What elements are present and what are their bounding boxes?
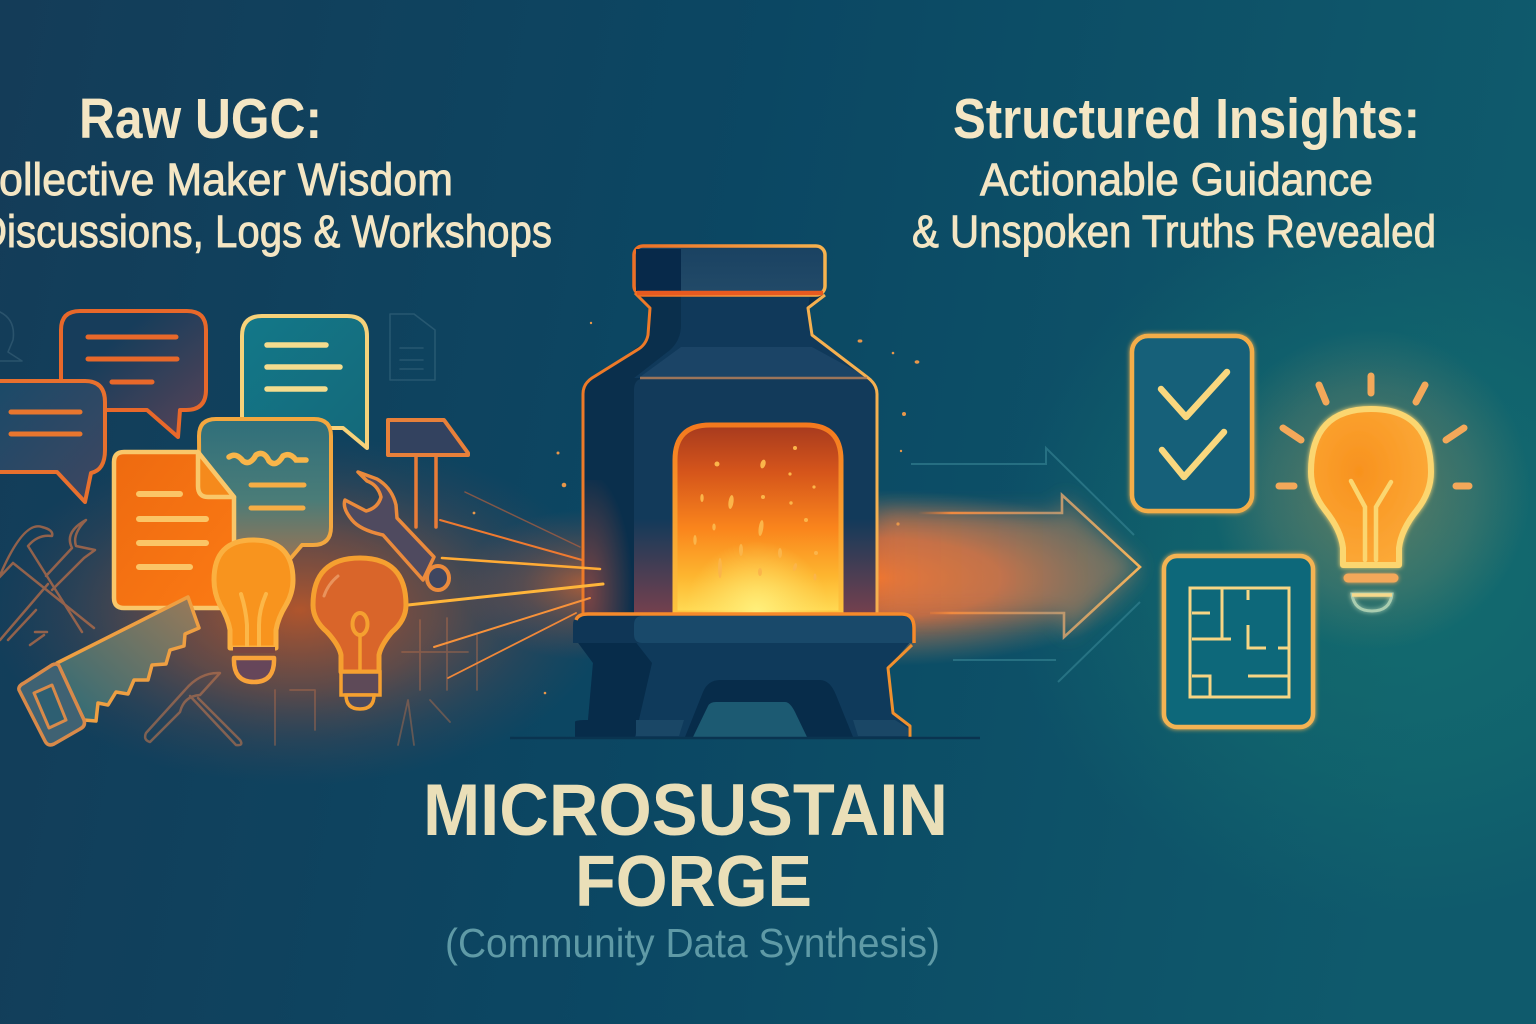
forge front shoulder	[634, 295, 867, 378]
panel: structured insight icons	[1132, 336, 1469, 727]
wrench	[344, 472, 449, 590]
hand saw	[19, 597, 199, 745]
light bulb: bright orange	[214, 540, 293, 682]
forge base slab	[573, 614, 914, 643]
faint background tool sketches	[0, 312, 477, 745]
title line 1: MICROSUSTAIN	[423, 770, 948, 851]
panel: raw UGC icon cluster	[0, 311, 468, 745]
forge shelf line	[640, 377, 867, 379]
light bulb: dim orange	[313, 558, 406, 709]
heading: structured insights	[912, 87, 1436, 257]
icon: glowing light bulb	[1311, 409, 1431, 611]
firebox	[675, 425, 841, 613]
forge body silhouette	[583, 293, 877, 613]
arrow: output	[891, 495, 1140, 637]
arrow outline	[918, 495, 1140, 637]
hammer	[388, 420, 468, 527]
flying sparks	[473, 322, 919, 694]
title line 2: FORGE	[575, 842, 812, 922]
speech bubble: blue left	[0, 381, 105, 502]
heading line: Raw UGC:	[79, 87, 322, 151]
forge legs	[575, 640, 912, 737]
forge outline right	[808, 295, 877, 613]
faint scaffold sketch	[275, 618, 477, 745]
heading line: Structured Insights:	[953, 87, 1420, 151]
icon: floor plan	[1164, 556, 1313, 727]
document: orange page	[114, 452, 234, 608]
arrow inner speed lines	[891, 548, 1085, 550]
panel: central forge	[510, 246, 980, 738]
side warm glow	[584, 480, 633, 613]
bulb rays	[1279, 376, 1469, 486]
panel: structured insight icons: soft glow	[1211, 330, 1531, 650]
sparks in firebox	[693, 446, 818, 580]
note card with scribble	[199, 419, 331, 565]
forge shoulder highlight	[640, 347, 867, 377]
faint document sketch	[0, 312, 435, 380]
subheading line 1: Actionable Guidance	[980, 154, 1373, 205]
pick sketch	[145, 673, 241, 745]
panel: forge glow	[460, 510, 710, 660]
speech bubble: teal	[242, 316, 367, 448]
faint back arrow	[911, 448, 1140, 682]
arrow inner speed line lower	[903, 578, 1092, 580]
speech bubble: orange outline	[61, 311, 206, 437]
title: MicroSustain Forge	[423, 770, 948, 966]
forge outline left	[583, 293, 650, 613]
glow behind raw inputs	[0, 435, 610, 785]
crossed tools sketch	[0, 520, 95, 645]
ground shadow	[510, 737, 980, 739]
panel: arrow glow	[610, 490, 1150, 666]
subheading line 2: & Unspoken Truths Revealed	[912, 206, 1436, 257]
forge front panel	[634, 378, 877, 613]
subtitle: (Community Data Synthesis)	[445, 920, 940, 966]
icon: checklist	[1132, 336, 1252, 511]
heading: raw UGC	[0, 87, 552, 257]
forge cap	[634, 246, 825, 295]
arrow fill haze	[880, 495, 1140, 637]
converging light rays	[408, 492, 603, 678]
